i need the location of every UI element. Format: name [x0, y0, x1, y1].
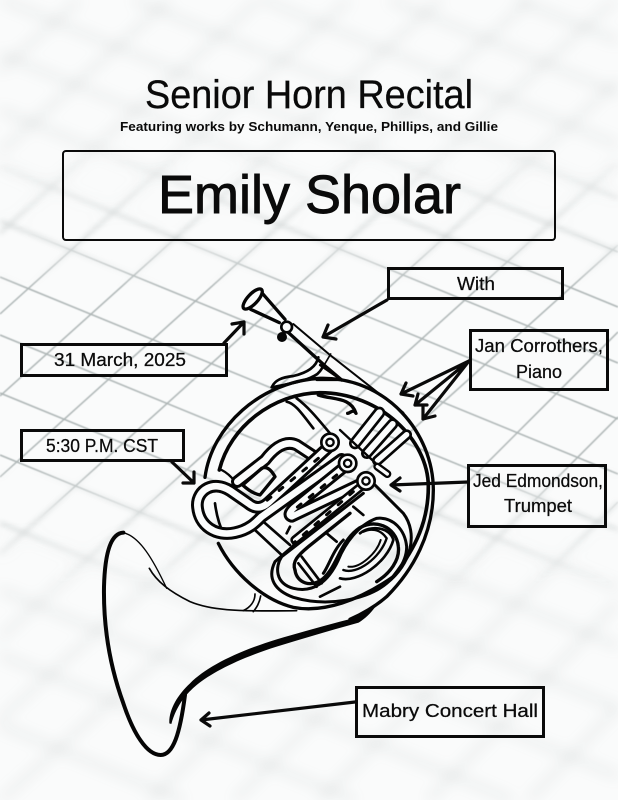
mouthpiece and lead pipe	[240, 286, 403, 413]
hook and brace	[318, 395, 356, 413]
french horn illustration	[104, 286, 433, 755]
middle U slide	[290, 465, 362, 517]
subtitle: Featuring works by Schumann, Yenque, Phillips, and Gillie	[120, 120, 498, 134]
valve slides	[355, 413, 379, 443]
lower S loop	[295, 524, 399, 584]
horn bell	[104, 533, 376, 755]
left S loop	[197, 447, 342, 534]
callout: trumpet	[468, 466, 606, 526]
title: Senior Horn Recital	[145, 73, 473, 117]
name box	[63, 151, 555, 240]
callout: pianist: Piano	[516, 362, 562, 382]
callout: venue: Mabry Concert Hall	[362, 701, 538, 721]
name box: Emily Sholar	[158, 165, 461, 225]
callout: trumpet: Trumpet	[504, 496, 572, 516]
horn rings and valves	[197, 378, 433, 619]
arrow: venue to bell	[201, 702, 355, 726]
callout: pianist	[470, 330, 608, 390]
callout: time	[22, 430, 184, 460]
lower big tube	[272, 485, 411, 602]
callout: date: 31 March, 2025	[54, 350, 186, 370]
arrow: With to lead pipe	[323, 300, 387, 339]
callout: With	[388, 268, 562, 298]
callout: trumpet: Jed Edmondson,	[473, 471, 603, 491]
callout: pianist: Jan Corrothers,	[475, 336, 603, 356]
arrow: trumpet to valves	[391, 478, 468, 491]
arrow: date to mouthpiece	[224, 322, 244, 343]
arrows: pianist to horn	[401, 361, 469, 419]
back tubes	[237, 443, 313, 482]
callout: venue	[356, 688, 544, 736]
valve rotors	[321, 434, 339, 451]
callout: date	[22, 344, 226, 376]
rings	[205, 378, 433, 619]
callout: time: 5:30 P.M. CST	[46, 436, 158, 456]
callout: With: With	[457, 274, 495, 294]
arrow: time to horn	[172, 462, 194, 483]
valve tube dashes	[263, 458, 353, 543]
inner ovals	[340, 528, 393, 579]
